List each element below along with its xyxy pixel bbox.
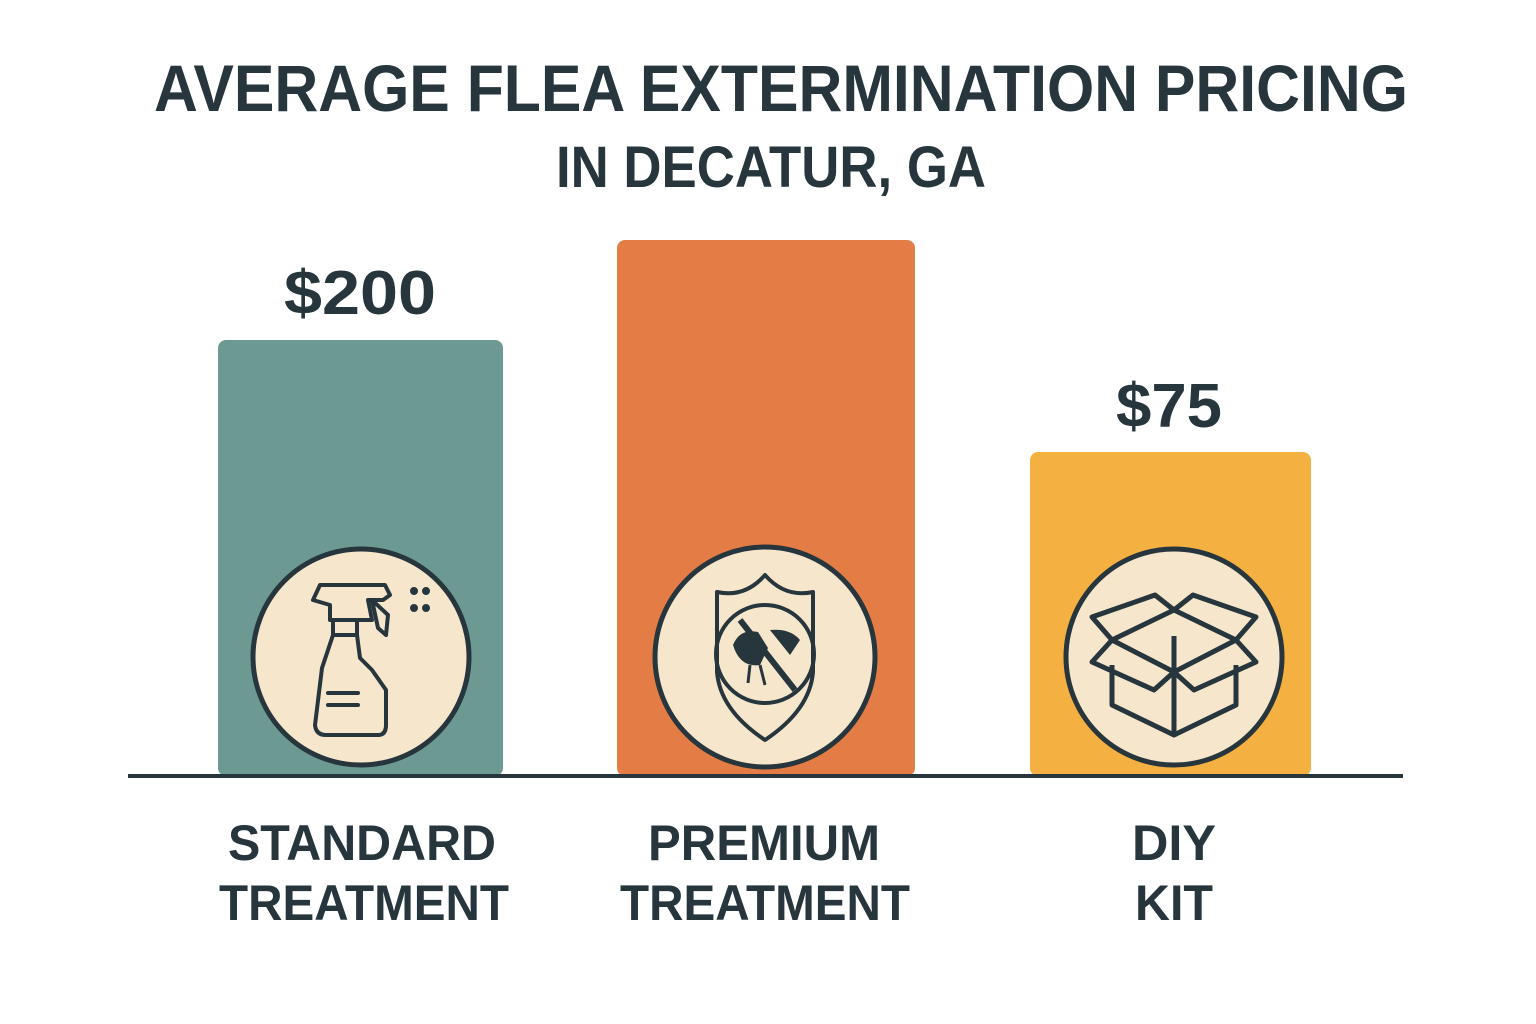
- icon: open box: [1066, 549, 1282, 765]
- label: DIY kit: DIY: [1132, 815, 1216, 871]
- baseline: [128, 774, 1403, 778]
- icon: spray bottle: [253, 549, 469, 765]
- price: $75: $75: [1116, 372, 1222, 441]
- label: standard treatment: [219, 815, 509, 931]
- label: standard treatment: STANDARD: [228, 815, 496, 871]
- title: AVERAGE FLEA EXTERMINATION PRICING: [154, 51, 1408, 125]
- label: DIY kit: [1132, 815, 1216, 931]
- icon: shield no-flea: [655, 547, 875, 767]
- price: $200: $200: [284, 259, 436, 328]
- label: premium treatment: [620, 815, 910, 931]
- label: DIY kit: KIT: [1135, 875, 1213, 931]
- bar: DIY kit: [1030, 452, 1311, 776]
- title: [154, 51, 1408, 200]
- bar: premium treatment: [617, 240, 915, 776]
- bar: standard treatment: [218, 340, 503, 776]
- label: standard treatment: TREATMENT: [219, 875, 509, 931]
- label: premium treatment: TREATMENT: [620, 875, 910, 931]
- label: premium treatment: PREMIUM: [648, 815, 880, 871]
- title: IN DECATUR, GA: [556, 135, 986, 200]
